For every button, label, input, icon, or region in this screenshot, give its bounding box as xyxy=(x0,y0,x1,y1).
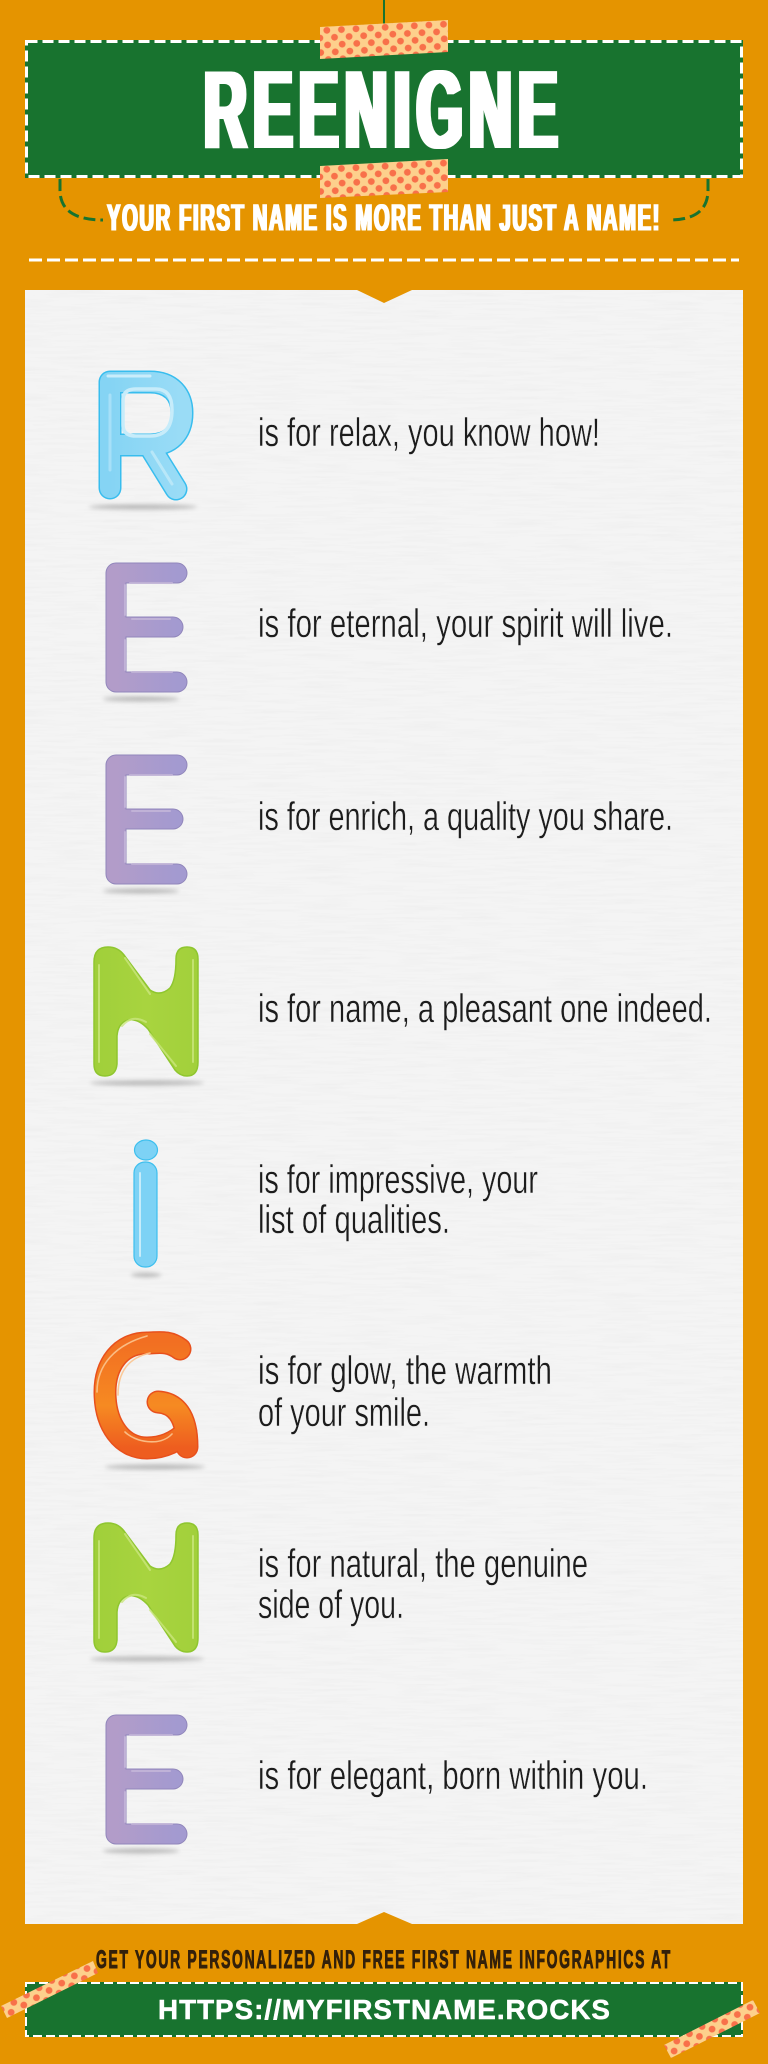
text: I: list of qualities. xyxy=(258,1198,450,1242)
icon: letter R xyxy=(89,376,197,510)
text: I xyxy=(258,1158,538,1242)
icon: letter E xyxy=(103,765,179,894)
footer banner xyxy=(25,1982,743,2037)
icon: letter N xyxy=(90,947,204,1086)
icon: letter G xyxy=(97,1336,205,1470)
bottom tape xyxy=(320,159,448,198)
title banner xyxy=(25,40,743,178)
subtitle connectors xyxy=(60,179,708,220)
hanging line xyxy=(383,0,385,26)
text: I: is for impressive, your xyxy=(258,1158,538,1202)
icon: letter E xyxy=(103,573,179,702)
top tape xyxy=(320,20,448,59)
text: G xyxy=(258,1349,552,1435)
text: G: of your smile. xyxy=(258,1391,430,1435)
footer URL: HTTPS://MYFIRSTNAME.ROCKS xyxy=(158,1994,611,2025)
text: N: side of you. xyxy=(258,1583,404,1627)
text: G: is for glow, the warmth xyxy=(258,1349,552,1393)
panel: letters xyxy=(25,290,743,1924)
footer tape: right xyxy=(664,2000,760,2058)
icon: letter N xyxy=(90,1523,204,1662)
text: R: is for relax, you know how! xyxy=(258,411,600,455)
icon: letter E xyxy=(103,1725,179,1854)
text: N xyxy=(258,1542,588,1627)
dashed divider xyxy=(29,258,739,262)
footer tape: left xyxy=(1,1961,98,2018)
text: N: is for natural, the genuine xyxy=(258,1542,588,1586)
icon: letter i xyxy=(131,1140,161,1277)
